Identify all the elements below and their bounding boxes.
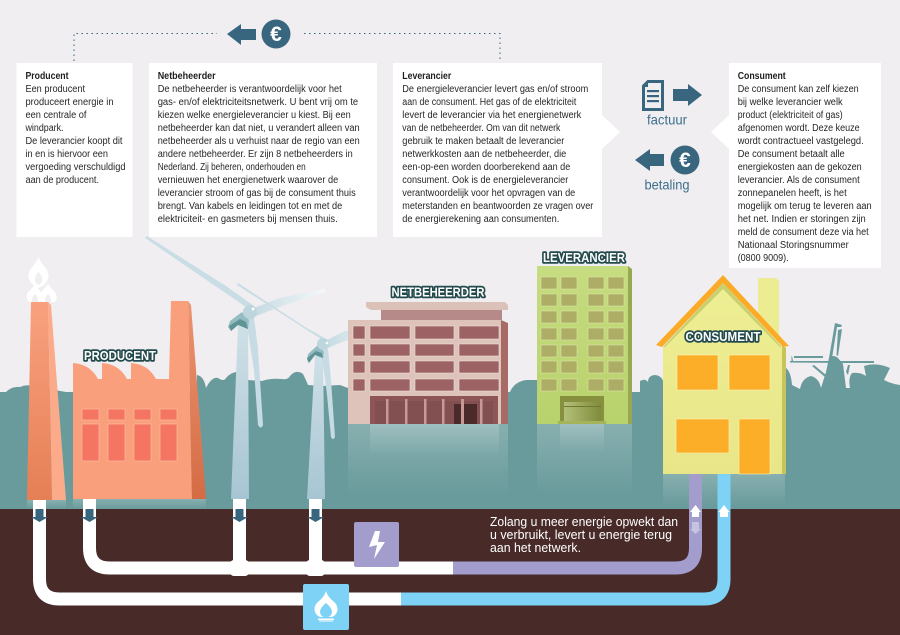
panel: netbeheerder: leverancier stroom of gas bij de consument thuis [158, 188, 356, 199]
panel: leverancier: netwerkkosten aan de netbeheerder, die [402, 149, 567, 160]
text: return delivery note: Zolang u meer energie opwekt dan [490, 515, 678, 529]
landscape skyline [0, 323, 900, 509]
panel: netbeheerder: andere netbeheerder. Er zijn 8 netbeheerders in [158, 149, 353, 160]
panel: netbeheerder: Nederland. Zij beheren, onderhouden en [158, 162, 306, 173]
panel: producent: De leverancier koopt dit [26, 136, 123, 147]
panel: consument: Nationaal Storingsnummer [738, 240, 849, 251]
panel: producent: Een producent [26, 84, 85, 95]
panel: consument: product (elektriciteit of gas) [738, 110, 843, 121]
panel: consument: meld de consument deze via het [738, 227, 869, 238]
panel: producent: produceert energie in [26, 97, 114, 108]
text: return delivery note [490, 515, 678, 555]
panel: leverancier: aan de consument. Het gas of de elektriciteit [402, 97, 576, 108]
gas network pipes [40, 474, 724, 599]
label: netbeheerder: NETBEHEERDER [392, 286, 484, 300]
chimney [27, 302, 66, 500]
windmill silhouette [786, 323, 900, 393]
icon: invoice document [642, 80, 662, 110]
panel: consument: bij welke leverancier welk [738, 97, 844, 108]
label: producent: PRODUCENT [84, 349, 156, 363]
icon: flames on chimney [27, 257, 57, 302]
panel: consument [711, 63, 881, 268]
icon: euro: € [679, 149, 691, 172]
panel: producent [16, 63, 132, 237]
panel: netbeheerder: elektriciteit- en gasmeters bij mensen thuis. [158, 214, 338, 225]
panel: netbeheerder: vernieuwen het energienetwerk waarover de [158, 175, 339, 186]
panel: leverancier: verantwoordelijk voor het opvragen van de [402, 188, 576, 199]
netbeheerder building [348, 302, 508, 424]
large wind turbine [145, 236, 326, 499]
panel: producent: windpark. [25, 123, 63, 134]
panel: producent: aan de producent. [26, 175, 99, 186]
panel: producent: in en is hiervoor een [26, 149, 108, 160]
panel: producent: vergoeding verschuldigd [26, 162, 126, 173]
panel: netbeheerder: brengt. Van kabels en leidingen tot en met de [158, 201, 343, 212]
panel: producent: Producent [26, 71, 69, 82]
panel: leverancier: van de netbeheerder. Om van dit netwerk [402, 123, 561, 134]
panel: leverancier: Leverancier [402, 71, 451, 82]
tree cluster left of house [640, 375, 663, 393]
panel: netbeheerder [149, 63, 377, 237]
text: factuur: factuur [647, 112, 687, 128]
panel: consument: afgenomen wordt. Deze keuze [738, 123, 860, 134]
panel: netbeheerder: gas- en/of elektriciteitsnetwerk. U bent vrij om te [158, 97, 359, 108]
tower windows [541, 277, 624, 391]
panel: leverancier: consument. Ook is de energieleverancier [402, 175, 569, 186]
icon: payment top arrow with euro: € [270, 23, 282, 46]
panel: netbeheerder: netbeheerder als u verhuist naar de regio van een [158, 136, 360, 147]
panel: leverancier: De energieleverancier levert gas en/of stroom [402, 84, 588, 95]
leverancier building [537, 266, 632, 424]
panel: consument: Consument [738, 71, 786, 82]
icon: electricity [354, 522, 399, 567]
panel: leverancier: een-op-een worden doorberekend aan de [402, 162, 571, 173]
reflections below buildings [27, 424, 785, 509]
panel: consument: energiekosten aan de gekozen [738, 162, 862, 173]
icon: payment top arrow with euro [227, 20, 290, 48]
label: consument: CONSUMENT [686, 330, 761, 344]
panel: consument: De consument kan zelf kiezen [738, 84, 859, 95]
panel: netbeheerder: Netbeheerder [158, 71, 216, 82]
panel: leverancier: meterstanden en beantwoorden ze vragen over [402, 201, 594, 212]
panel: netbeheerder: De netbeheerder is verantwoordelijk voor het [158, 84, 342, 95]
consumer house [656, 275, 789, 474]
flow arrows [31, 505, 730, 534]
office windows [353, 326, 499, 391]
panel: consument: wordt contractueel vastgelegd. [737, 136, 864, 147]
text: return delivery note: u verbruikt, levert u energie terug [490, 528, 672, 542]
arrow: payment [635, 149, 664, 171]
panel: netbeheerder: kiezen welke energieleverancier u kiest. Bij een [158, 110, 351, 121]
dotted money flow line [74, 34, 500, 61]
text: return delivery note: aan het netwerk. [490, 541, 581, 555]
panel: leverancier: gebruik te maken betaalt de leverancier [402, 136, 565, 147]
text: betaling: betaling [644, 176, 690, 192]
panel: consument: mogelijk om terug te leveren aan [738, 201, 872, 212]
panel: producent: een centrale of [26, 110, 87, 121]
soil [0, 509, 900, 635]
house windows [676, 355, 770, 474]
panel: consument: het net. Indien er storingen zijn [738, 214, 866, 225]
panel: leverancier: de energierekening aan consumenten. [402, 214, 559, 225]
panel: leverancier: levert de leverancier via het energienetwerk [402, 110, 582, 121]
label: leverancier: LEVERANCIER [543, 251, 625, 265]
electricity network pipes [90, 474, 696, 576]
arrow: invoice [673, 84, 702, 106]
panel: consument: (0800 9009). [738, 253, 789, 264]
panel: consument: zonnepanelen heeft, is het [738, 188, 847, 199]
icon: gas [303, 584, 349, 630]
panel: consument: leverancier. Als de consument [738, 175, 860, 186]
entrance [370, 396, 498, 424]
panel: netbeheerder: netbeheerder kan dat niet, u verandert alleen van [158, 123, 360, 134]
panel: consument: De consument betaalt alle [738, 149, 845, 160]
icon: euro [670, 146, 700, 174]
small wind turbine [237, 283, 387, 499]
factory windows [82, 409, 177, 461]
factory [73, 301, 206, 499]
panel: leverancier [393, 63, 620, 237]
tower entrance [558, 396, 606, 424]
